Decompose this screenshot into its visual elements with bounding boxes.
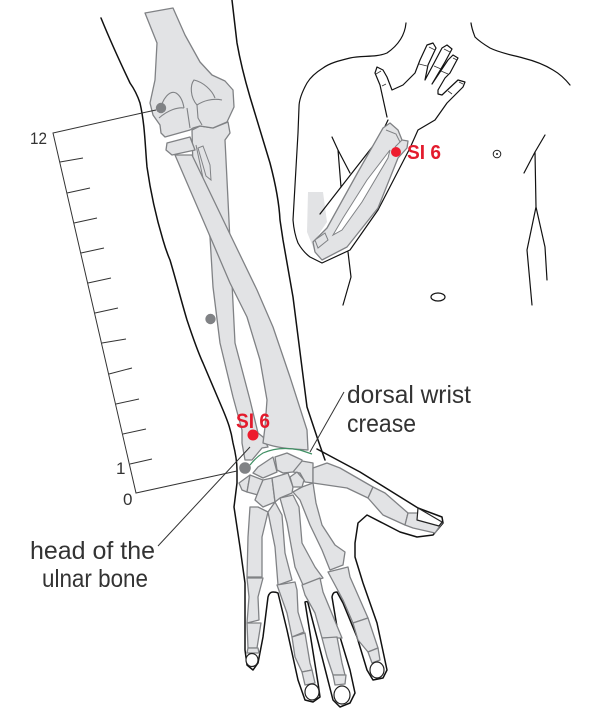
acupoint marker: SI 6 on inset [391, 147, 401, 157]
finger creases in inset hand [376, 47, 463, 94]
acupoint marker: SI 6 [248, 430, 258, 440]
label: head of the ulnar bone: ulnar bone [42, 565, 148, 593]
body inset: torso with raised forearm [293, 23, 570, 305]
thumb bones [313, 463, 442, 533]
torso outline [293, 23, 570, 305]
ruler frame [53, 113, 237, 493]
ruler ticks [60, 158, 152, 464]
label: SI 6: SI 6 [236, 410, 270, 433]
ruler label 0: 0 [123, 490, 132, 509]
carpal bones [239, 453, 313, 507]
label: SI 6 on inset: SI 6 [407, 142, 441, 164]
leader line: dorsal wrist crease [310, 392, 344, 452]
thumb nail [417, 508, 442, 526]
reference point: mid forearm [205, 314, 216, 324]
radius head [166, 137, 195, 155]
leader line: head of the ulnar bone [158, 447, 250, 546]
inset upper arm bone [307, 192, 327, 252]
interosseous notch [196, 145, 211, 180]
finger nails [246, 654, 384, 704]
ring finger bones [277, 582, 315, 685]
humerus condyle detail [159, 80, 222, 128]
bone: ulna [192, 122, 268, 460]
dorsal wrist crease line [250, 449, 312, 465]
label: dorsal wrist crease: dorsal wrist [347, 381, 471, 409]
bone: radius [175, 155, 308, 450]
bone: humerus [145, 8, 234, 137]
label: dorsal wrist crease: crease [347, 410, 416, 438]
reference point: head of ulna [239, 462, 251, 474]
connector to elbow point [142, 110, 156, 113]
middle finger bones [302, 578, 346, 685]
index finger bones [328, 567, 380, 663]
ruler label 1: 1 [116, 459, 125, 478]
arm outline [101, 0, 443, 707]
reference point: elbow [156, 103, 166, 113]
metacarpals [247, 483, 345, 585]
label: head of the ulnar bone: head of the [30, 537, 155, 565]
navel [431, 293, 445, 301]
nipple [493, 150, 501, 158]
proportional ruler [30, 113, 237, 509]
hand skeleton [239, 453, 442, 704]
forearm bones in inset [313, 123, 408, 260]
ruler label 12: 12 [30, 129, 47, 148]
little finger bones [247, 578, 263, 653]
